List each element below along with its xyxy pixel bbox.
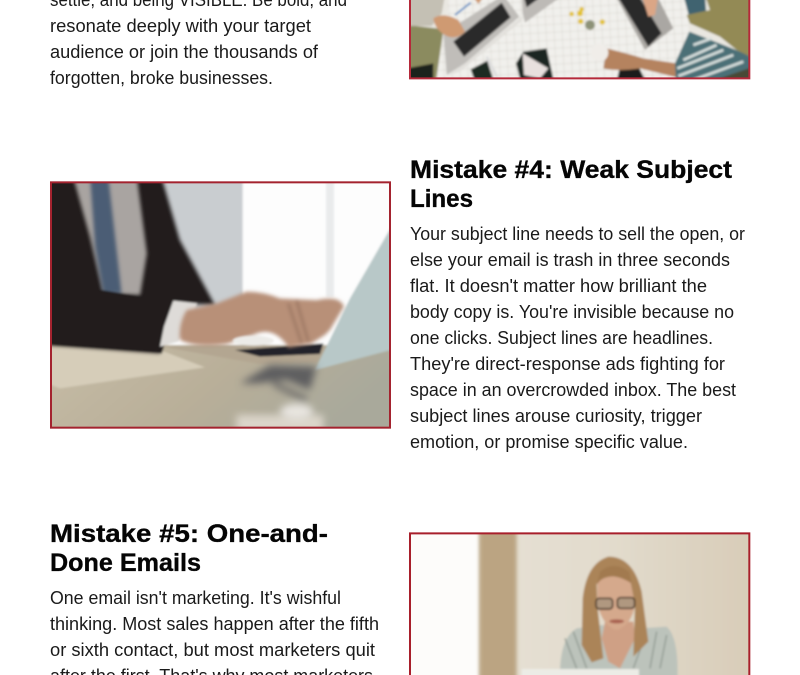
heading: mistake 4: Lines — [410, 185, 473, 213]
table — [47, 345, 393, 433]
heading: mistake 5 — [50, 520, 328, 577]
mouth — [609, 619, 624, 623]
notebooks — [471, 61, 494, 82]
table tiles — [436, 0, 692, 82]
suit — [47, 177, 215, 353]
text block: mistake 5 body: or sixth contact, but most marketers quit — [50, 640, 375, 660]
text block: mistake 4 body: emotion, or promise specific value. — [410, 432, 688, 452]
text block: mistake 5 body: One email isn't marketing. It's wishful — [50, 588, 341, 608]
text block: end of mistake 3: resonate deeply with your target — [50, 16, 311, 36]
neck and chest — [602, 622, 635, 668]
text block: mistake 5 body: thinking. Most sales happen after the fifth — [50, 614, 379, 634]
text block: mistake 4 body: Your subject line needs to sell the open, or — [410, 224, 745, 244]
laptop — [522, 669, 639, 675]
photo: businessman typing on laptop — [47, 177, 393, 433]
face — [597, 576, 635, 630]
wall, window and post — [478, 534, 748, 675]
text block: mistake 4 body: space in an overcrowded inbox. The best — [410, 380, 736, 400]
frame — [410, 0, 749, 78]
frame — [51, 182, 390, 428]
shirt and tie — [73, 177, 147, 295]
photo: woman with glasses at laptop — [407, 530, 753, 675]
wall and window — [272, 342, 324, 347]
hand — [180, 292, 344, 347]
heading: mistake 5: Mistake #5: One-and- — [50, 520, 328, 548]
text block: mistake 4 body: one clicks. Subject lines are headlines. — [410, 328, 713, 348]
text block: mistake 4 body: subject lines arouse curiosity, trigger — [410, 406, 702, 426]
flowers and cup — [569, 7, 605, 25]
shirt — [560, 625, 678, 675]
hair — [582, 557, 648, 662]
text block: end of mistake 3 — [50, 0, 347, 88]
right laptop — [615, 0, 673, 50]
text block: end of mistake 3: audience or join the thousands of — [50, 42, 319, 62]
text block: mistake 4 body: else your email is trash in three seconds — [410, 250, 730, 270]
text block: mistake 4 body: flat. It doesn't matter how brilliant the — [410, 276, 707, 296]
photo: team with laptops from above — [407, 0, 753, 82]
left person sweater and olive chair — [411, 24, 444, 78]
heading: mistake 4 — [410, 156, 733, 213]
glasses — [596, 598, 635, 609]
heading: mistake 5: Done Emails — [50, 549, 201, 577]
text block: end of mistake 3: forgotten, broke businesses. — [50, 68, 273, 88]
text block: mistake 5 body — [50, 588, 379, 675]
left hand — [433, 15, 465, 37]
laptop screen — [315, 223, 393, 370]
laptop base and keyboard — [172, 346, 319, 362]
centre laptop — [522, 0, 563, 23]
text block: mistake 4 body — [410, 224, 745, 452]
text block: mistake 4 body: body copy is. You're invisible because no — [410, 302, 734, 322]
frame — [410, 533, 749, 675]
heading: mistake 4: Mistake #4: Weak Subject — [410, 156, 733, 184]
cuff — [160, 301, 197, 347]
right person hair — [687, 0, 753, 58]
glasses — [240, 365, 317, 420]
left laptop — [443, 0, 519, 75]
text block: mistake 4 body: They're direct-response ads fighting for — [410, 354, 725, 374]
right person arm and shirt — [603, 48, 677, 77]
